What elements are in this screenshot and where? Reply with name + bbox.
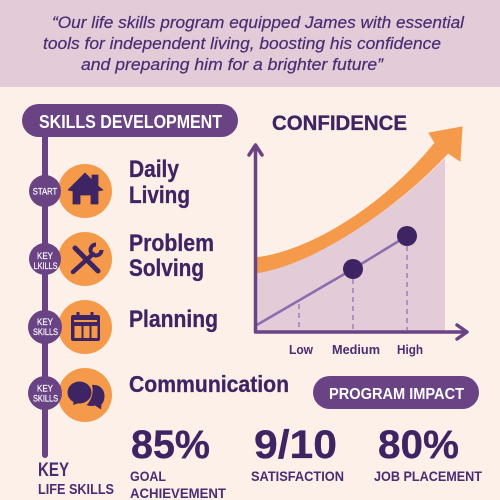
footer label: key life skills — [38, 460, 114, 498]
step: daily living — [29, 156, 190, 218]
step: planning: KEY — [37, 317, 54, 328]
step: planning — [28, 300, 218, 354]
axis labels: Low — [289, 342, 314, 357]
chart title: CONFIDENCE — [272, 112, 407, 135]
heading pill: skills development: SKILLS DEVELOPMENT — [39, 112, 222, 132]
area under curve — [255, 158, 445, 331]
step: daily living: Living — [129, 182, 190, 209]
stat: job placement: JOB PLACEMENT — [374, 468, 482, 484]
step: daily living: START — [33, 186, 57, 198]
stat: satisfaction: 9/10 — [254, 423, 337, 467]
step: planning: SKILLS — [33, 327, 58, 338]
footer label: key life skills: LIFE SKILLS — [38, 481, 114, 498]
stat: goal achievement — [130, 423, 226, 500]
data line — [255, 236, 407, 326]
stat: job placement — [374, 423, 482, 484]
quote banner — [0, 0, 500, 87]
axis labels — [289, 342, 423, 357]
step: daily living: Daily — [129, 156, 180, 183]
stat: job placement: 80% — [378, 423, 459, 467]
step: communication: SKILLS — [33, 394, 58, 405]
axes — [256, 146, 466, 332]
axis labels: Medium — [332, 342, 380, 357]
dashed guides — [299, 246, 407, 330]
step: problem solving: KEY — [37, 251, 54, 262]
step: problem solving: Solving — [129, 255, 204, 282]
stat: goal achievement: GOAL — [130, 468, 166, 484]
quote banner: and preparing him for a brighter future” — [81, 55, 384, 74]
step: problem solving: LKILLS — [34, 261, 58, 272]
timeline spine — [42, 130, 48, 458]
heading pill: program impact: PROGRAM IMPACT — [329, 386, 464, 403]
quote banner: “Our life skills program equipped James with essential — [52, 13, 465, 32]
heading pill: program impact — [313, 376, 479, 409]
orange growth arrow — [255, 127, 462, 273]
step: communication — [28, 368, 289, 422]
confidence chart — [249, 127, 467, 357]
axis labels: High — [397, 342, 423, 357]
icon: speech bubbles — [68, 382, 105, 410]
step: communication: KEY — [37, 384, 54, 395]
heading pill: skills development — [22, 104, 238, 137]
icon: wrench and screwdriver — [73, 244, 102, 272]
stat: satisfaction — [251, 423, 344, 484]
stat: satisfaction: SATISFACTION — [251, 468, 344, 484]
icon: calendar — [71, 312, 100, 341]
stat: goal achievement: 85% — [131, 423, 210, 467]
step: problem solving — [29, 230, 214, 286]
icon: house — [68, 173, 103, 204]
step: problem solving: Problem — [129, 230, 214, 257]
footer label: key life skills: KEY — [38, 460, 69, 481]
step: communication: Communication — [129, 371, 289, 397]
quote banner: tools for independent living, boosting his confidence — [43, 34, 441, 53]
data points — [343, 226, 417, 279]
step: planning: Planning — [129, 306, 218, 333]
